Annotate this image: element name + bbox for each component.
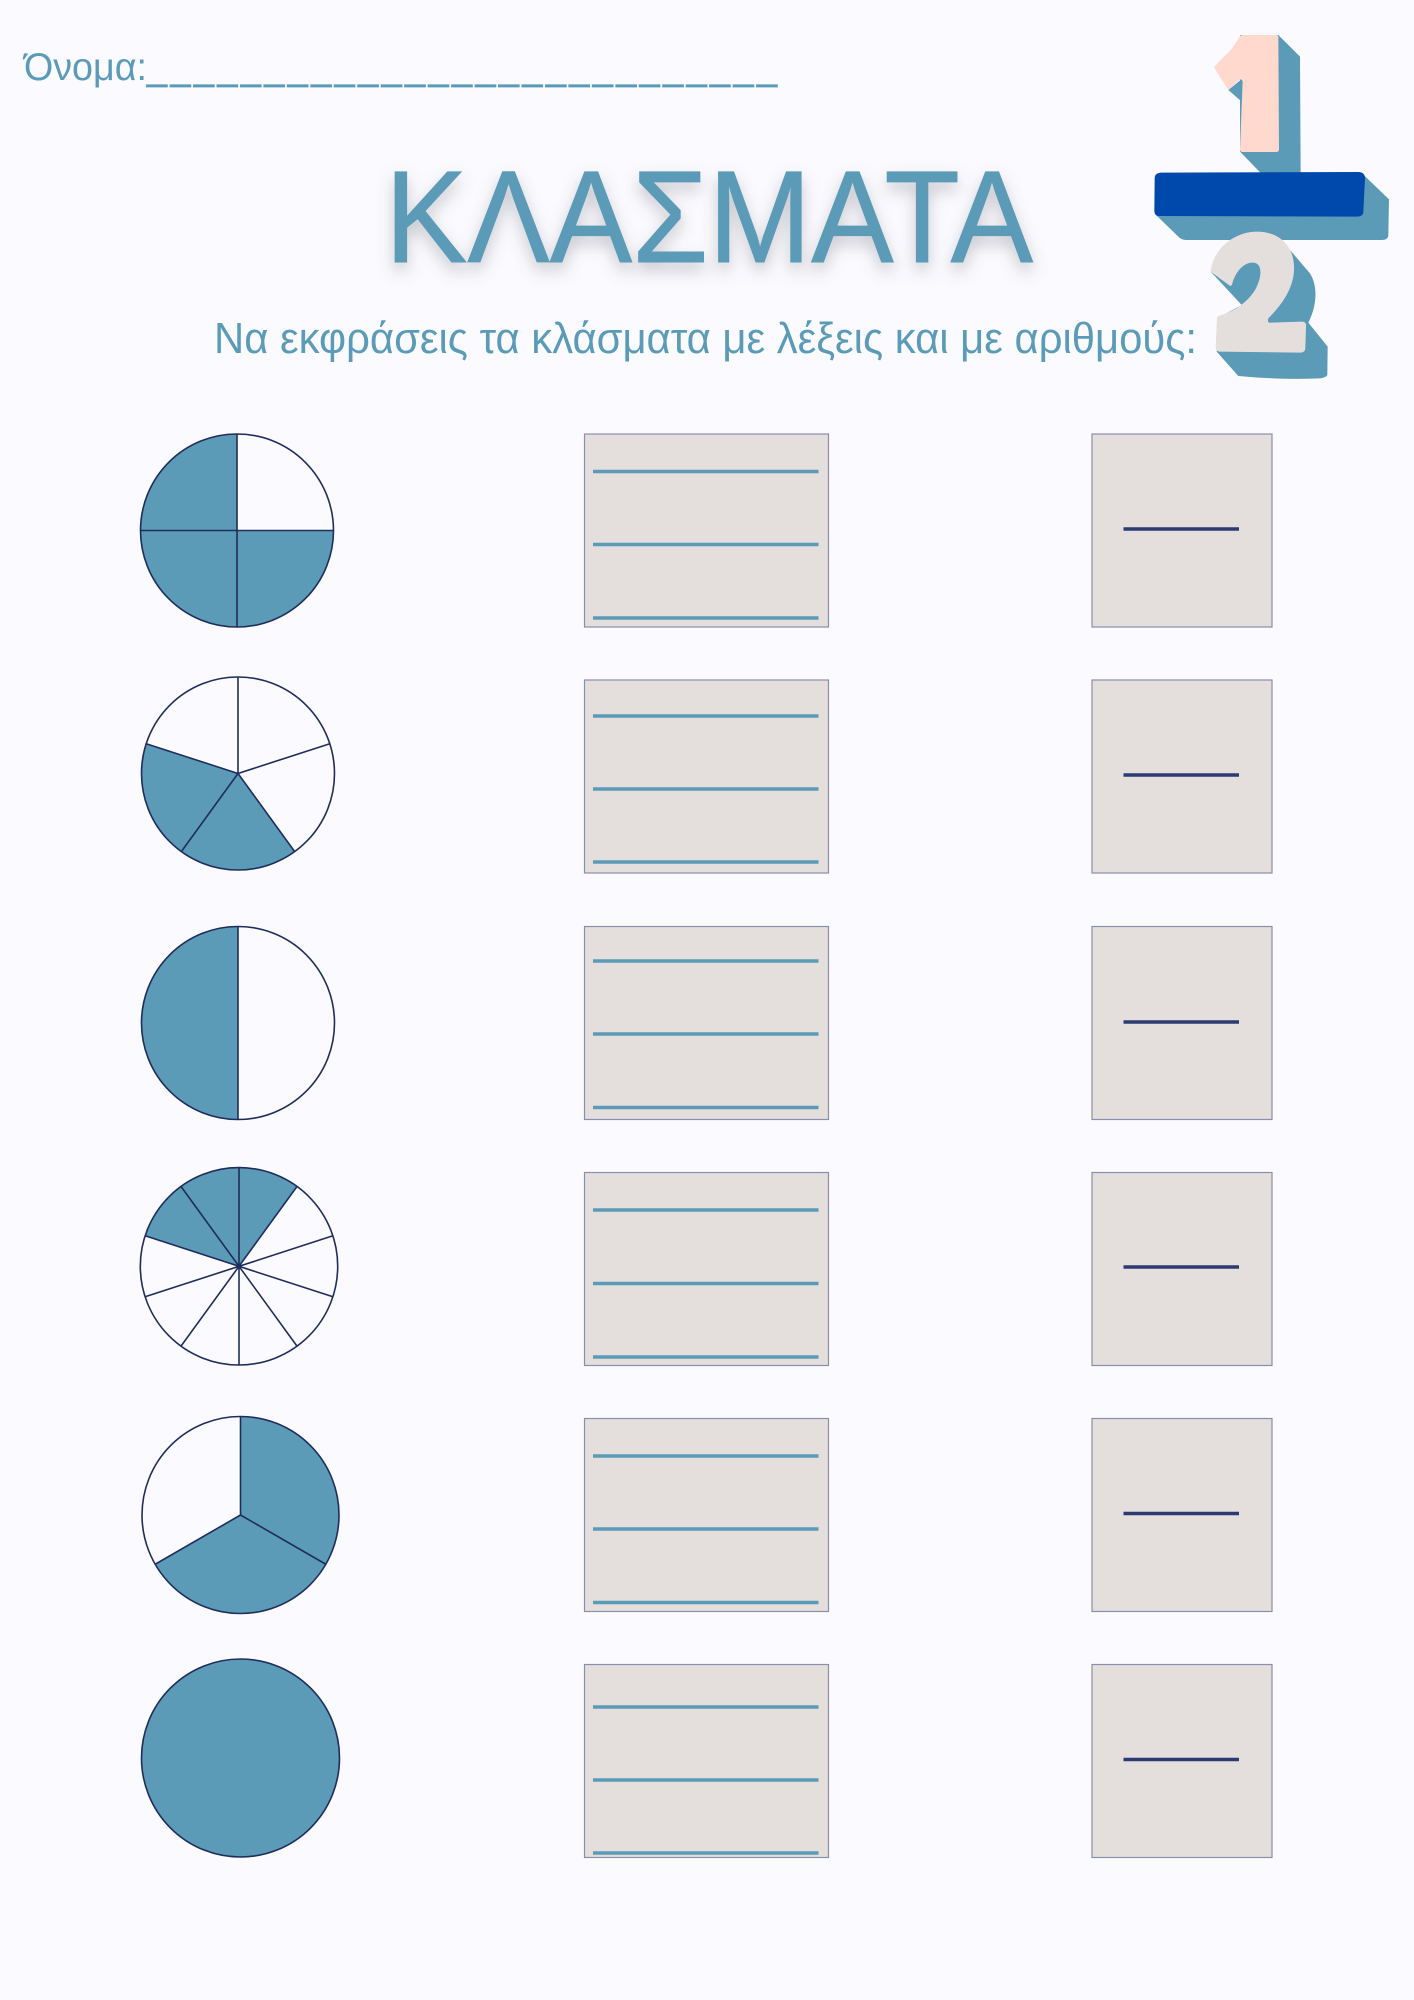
word answer box: [584, 926, 828, 1120]
pie: 2 of 5 shaded: [141, 677, 334, 870]
subtitle instruction: Να εκφράσεις τα κλάσματα με λέξεις και με αριθμούς:: [214, 314, 1197, 363]
row 5: [142, 1416, 1272, 1614]
pie: 3 of 4 shaded: [140, 434, 334, 627]
number answer box: [1092, 1172, 1272, 1366]
pie: 3 of 10 shaded: [140, 1168, 338, 1365]
row 2: [141, 677, 1272, 873]
number answer box: [1092, 1664, 1272, 1858]
title: ΚΛΑΣΜΑΤΑ: [385, 143, 1034, 290]
word answer box: [584, 1664, 828, 1858]
number answer box: [1092, 680, 1272, 873]
number answer box: [1092, 434, 1272, 627]
name field: ___________________________: [146, 47, 778, 88]
row 1: [140, 434, 1272, 627]
row 6: [142, 1659, 1272, 1858]
word answer box: [584, 1418, 828, 1612]
icon: 3D fraction one half: [1154, 35, 1389, 379]
row 3: [142, 926, 1272, 1120]
pie: fully shaded: [142, 1659, 340, 1857]
number answer box: [1092, 926, 1272, 1120]
pie: 1 of 2 shaded: [142, 926, 334, 1120]
word answer box: [584, 434, 828, 627]
row 4: [140, 1168, 1272, 1366]
name field: Όνομα:: [22, 46, 147, 89]
word answer box: [584, 680, 828, 873]
word answer box: [584, 1172, 828, 1366]
number answer box: [1092, 1418, 1272, 1612]
pie: 2 of 3 shaded: [142, 1416, 339, 1614]
